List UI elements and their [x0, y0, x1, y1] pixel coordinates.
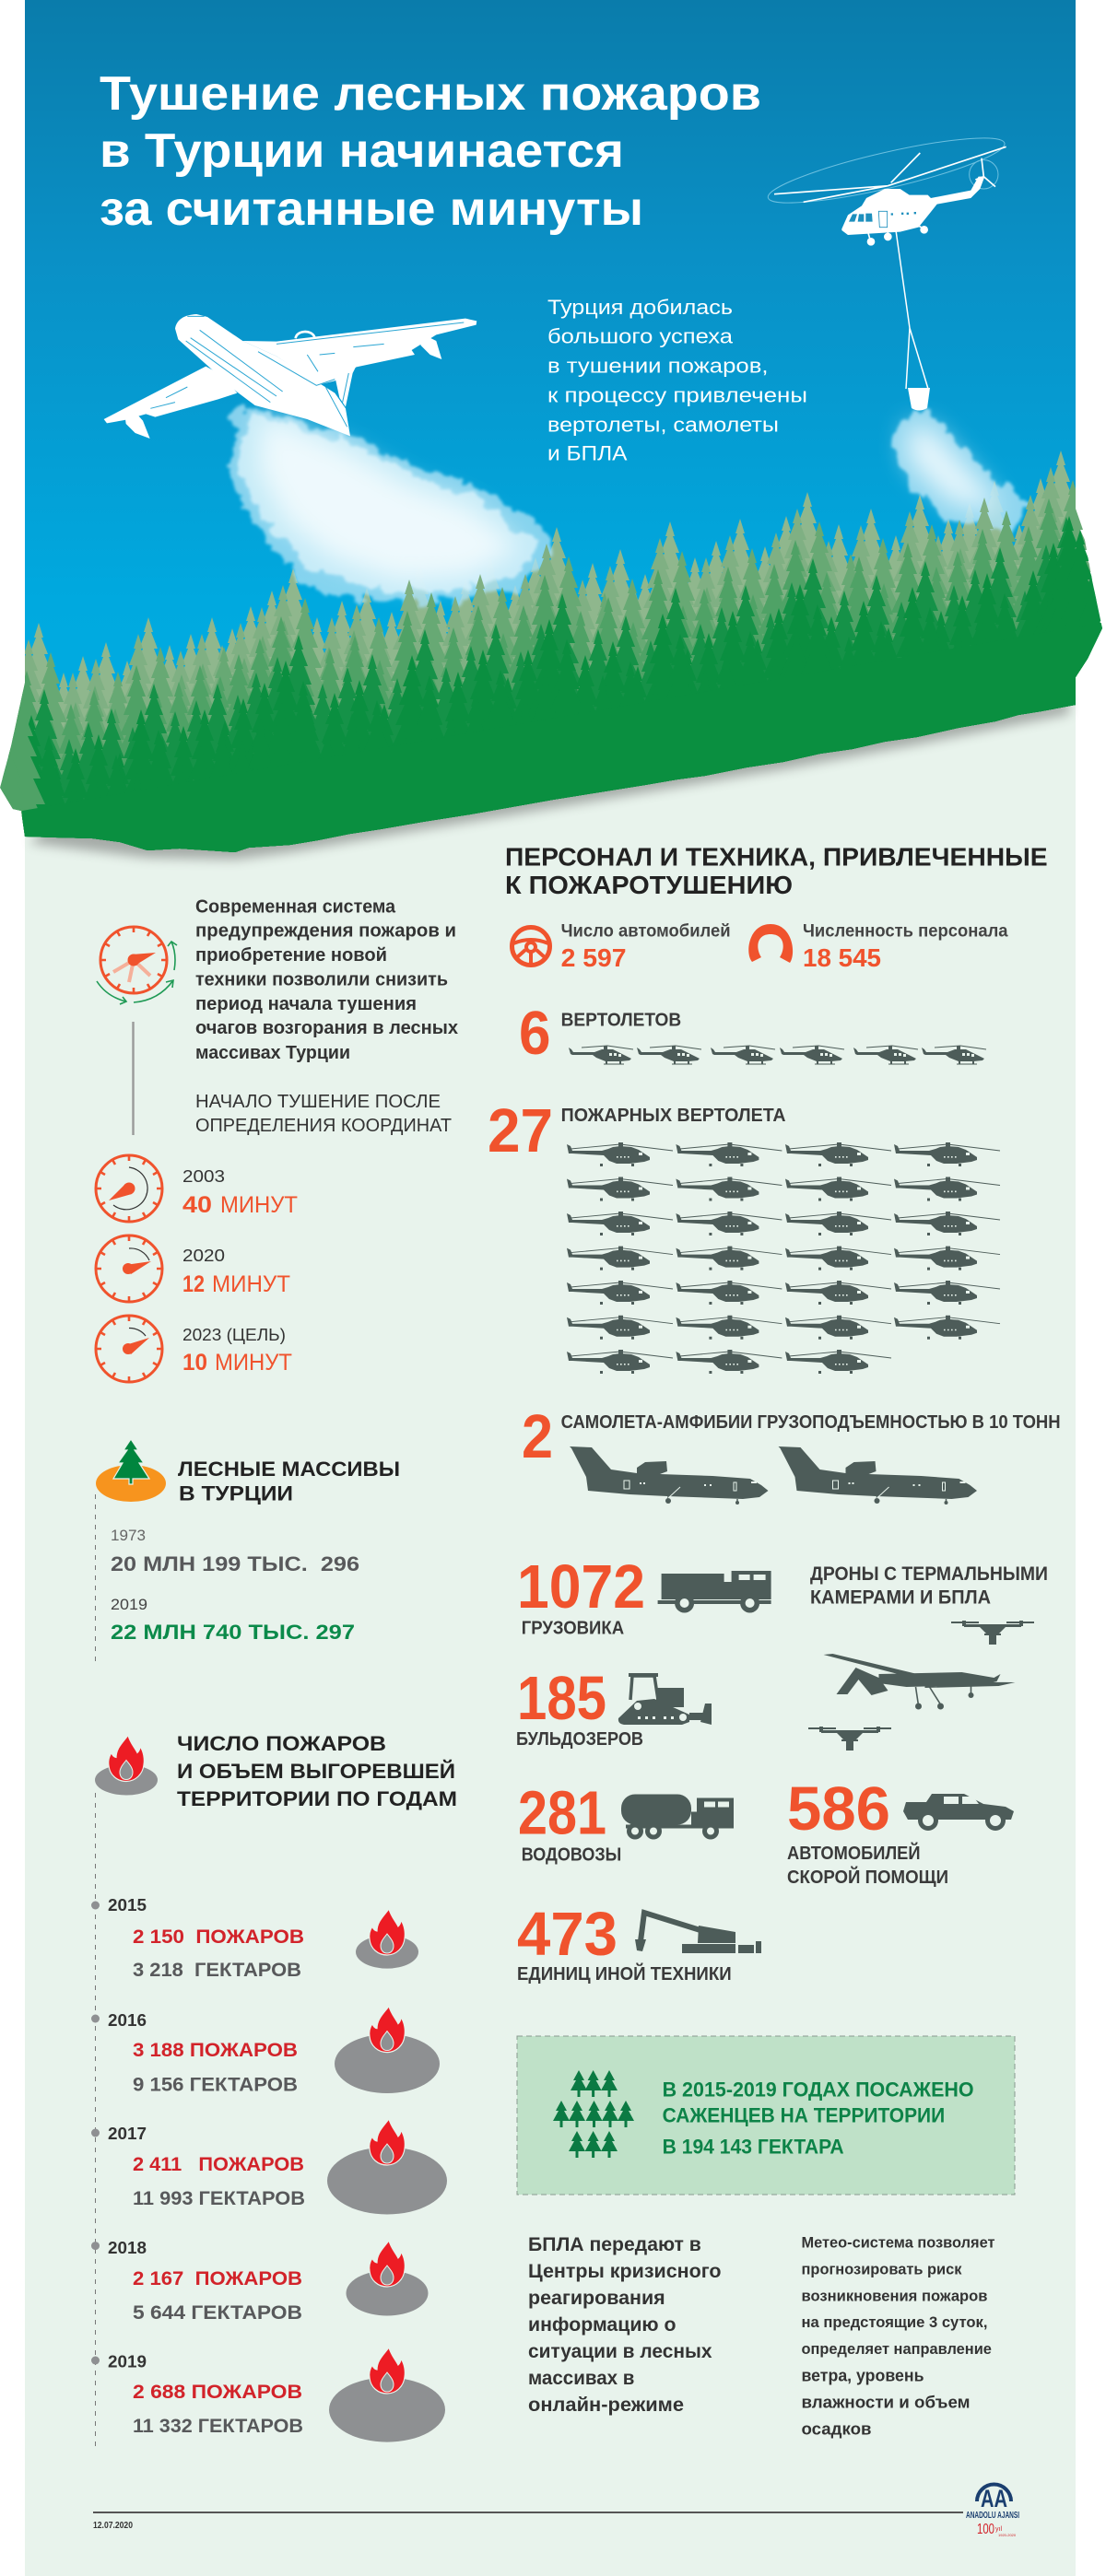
stat: 281 water trucks: 281: [518, 1778, 606, 1848]
stat: personnel: [803, 922, 1008, 972]
year 2017: 2017: [108, 2125, 147, 2143]
stat: 586 ambulances: 586: [787, 1774, 890, 1844]
year 2015: 2015: [108, 1896, 147, 1914]
decorative connector: [132, 1022, 135, 1135]
stat: 2 amphibious planes: САМОЛЕТА-АМФИБИИ ГРУЗОПОДЪЕМНОСТЬЮ В 10 ТОНН: [561, 1412, 1061, 1433]
time 2023: 2023 (ЦЕЛЬ): [182, 1326, 286, 1344]
stat: 473 other equipment: 473: [517, 1900, 618, 1969]
helicopter grid: [567, 1142, 1000, 1374]
intro text: в тушении пожаров,: [547, 354, 769, 378]
stat: 281 water trucks: ВОДОВОЗЫ: [522, 1844, 621, 1865]
year 2016: 3 188 ПОЖАРОВ: [133, 2040, 298, 2061]
stat: 1072 trucks: ГРУЗОВИКА: [522, 1619, 624, 1639]
intro text: Турция добилась: [547, 296, 733, 319]
decorative timeline: [94, 1494, 96, 1665]
year 2019: [91, 2348, 445, 2442]
stat: 586 ambulances: АВТОМОБИЛЕЙ: [787, 1842, 920, 1864]
clock 2003: [96, 1155, 162, 1222]
text block: warning system: период начала тушения: [195, 994, 417, 1014]
stat: vehicles: [561, 922, 731, 972]
forest heading text: В ТУРЦИИ: [179, 1481, 293, 1505]
stat: personnel: 18 545: [803, 943, 881, 972]
callout text: [663, 2078, 974, 2158]
icon: quadcopter bottom: [808, 1727, 891, 1751]
subheading: start of extinguishing: НАЧАЛО ТУШЕНИЕ ПОСЛЕ: [195, 1092, 441, 1112]
text block: weather system: определяет направление: [802, 2340, 992, 2358]
fires heading icon: [95, 1736, 158, 1795]
year 2017: [91, 2119, 447, 2215]
year 2017: 2 411 ПОЖАРОВ: [133, 2154, 304, 2175]
year 2015: [91, 1896, 418, 1981]
intro text: к процессу привлечены: [547, 383, 807, 407]
logo: Anadolu Ajansi: AA: [981, 2485, 1007, 2512]
fires heading text: ЧИСЛО ПОЖАРОВ: [177, 1732, 386, 1755]
forest stats: 1973: [111, 1527, 146, 1544]
intro text: большого успеха: [547, 324, 734, 348]
logo: Anadolu Ajansi: 1920-2020: [998, 2533, 1017, 2537]
forest stats: 2019: [111, 1596, 147, 1613]
text block: UAV: БПЛА передают в: [528, 2234, 701, 2255]
text block: UAV: реагирования: [528, 2288, 665, 2309]
text block: weather system: прогнозировать риск: [802, 2261, 962, 2277]
time 2003: 2003: [182, 1167, 225, 1186]
text block: warning system: приобретение новой: [195, 945, 387, 966]
year 2019: 11 332 ГЕКТАРОВ: [133, 2416, 303, 2437]
text block: weather system: [802, 2234, 995, 2438]
forest stats: 20 МЛН 199 ТЫС. 296: [111, 1552, 359, 1575]
year 2017: 11 993 ГЕКТАРОВ: [133, 2188, 305, 2209]
text block: warning system: предупреждения пожаров и: [195, 921, 456, 942]
forest heading text: [178, 1458, 400, 1505]
logo: Anadolu Ajansi: 100: [977, 2522, 994, 2537]
logo: Anadolu Ajansi: [966, 2484, 1019, 2537]
time 2023: [182, 1326, 292, 1376]
hero: sky and forest: [0, 0, 1102, 852]
title: за считанные минуты: [100, 182, 643, 236]
text block: weather system: влажности и объем: [802, 2394, 970, 2412]
forest stats: [111, 1527, 359, 1644]
drones heading: [810, 1563, 1048, 1609]
planting callout: [517, 2036, 1015, 2195]
icon: tanker: [621, 1795, 734, 1839]
stat: 473 other equipment: ЕДИНИЦ ИНОЙ ТЕХНИКИ: [517, 1962, 732, 1985]
clock 2020: [96, 1235, 162, 1302]
stat: 185 bulldozers: БУЛЬДОЗЕРОВ: [516, 1729, 643, 1750]
title: Тушение лесных пожаров: [100, 67, 761, 121]
year 2018: 2018: [108, 2239, 147, 2257]
logo: Anadolu Ajansi: yıl: [995, 2526, 1002, 2533]
stat: 586 ambulances: СКОРОЙ ПОМОЩИ: [787, 1866, 948, 1888]
stat: 185 bulldozers: 185: [517, 1664, 606, 1733]
subheading: start of extinguishing: ОПРЕДЕЛЕНИЯ КООРДИНАТ: [195, 1116, 452, 1136]
year 2016: 2016: [108, 2011, 147, 2030]
text block: UAV: массивах в: [528, 2368, 634, 2389]
forest heading with icon: [96, 1439, 166, 1502]
title: [100, 67, 761, 236]
stat: 6 helicopters: [519, 999, 681, 1068]
intro text: и БПЛА: [547, 442, 628, 464]
stat: 27 fire helicopters: ПОЖАРНЫХ ВЕРТОЛЕТА: [561, 1106, 786, 1126]
year 2018: 5 644 ГЕКТАРОВ: [133, 2302, 302, 2324]
icon: main clock: [97, 927, 177, 1004]
stat: 2 amphibious planes: [522, 1402, 1061, 1471]
intro text: вертолеты, самолеты: [547, 413, 779, 437]
far tree row: [7, 451, 1070, 810]
fires heading text: [177, 1732, 457, 1810]
text block: weather system: ветра, уровень: [802, 2367, 924, 2385]
text block: weather system: возникновения пожаров: [802, 2287, 988, 2304]
stat: 185 bulldozers: [516, 1664, 643, 1750]
water spray from helicopter: [896, 410, 1030, 535]
text block: UAV: информацию о: [528, 2314, 677, 2336]
stat: 1072 trucks: 1072: [517, 1552, 645, 1622]
fires heading text: ТЕРРИТОРИИ ПО ГОДАМ: [177, 1787, 457, 1810]
year 2019: 2019: [108, 2353, 147, 2371]
fires heading text: И ОБЪЕМ ВЫГОРЕВШЕЙ: [177, 1760, 455, 1783]
text block: UAV: Центры кризисного: [528, 2261, 721, 2282]
date: 12.07.2020: [93, 2521, 133, 2531]
text block: warning system: очагов возгорания в лесных: [195, 1018, 458, 1038]
forest layers: [0, 467, 1102, 852]
icon: truck: [658, 1571, 771, 1612]
decorative footer rule: [93, 2512, 963, 2513]
year 2015: 3 218 ГЕКТАРОВ: [133, 1960, 301, 1981]
drones heading: КАМЕРАМИ И БПЛА: [810, 1587, 991, 1609]
icon: helicopter with bucket: [764, 126, 1008, 410]
stat: 6 helicopters: 6: [519, 999, 551, 1068]
text block: weather system: Метео-система позволяет: [802, 2234, 995, 2252]
small helicopters row: [569, 1046, 986, 1064]
drones heading: ДРОНЫ С ТЕРМАЛЬНЫМИ: [810, 1563, 1048, 1585]
time 2003: 40: [182, 1192, 212, 1218]
forest shadow: [29, 700, 1069, 860]
stat: 6 helicopters: ВЕРТОЛЕТОВ: [561, 1010, 681, 1030]
forest heading text: ЛЕСНЫЕ МАССИВЫ: [178, 1458, 400, 1481]
text block: warning system: Современная система: [195, 896, 396, 917]
callout text: В 2015-2019 ГОДАХ ПОСАЖЕНО: [663, 2078, 974, 2102]
icon: trees: [553, 2070, 634, 2158]
text block: warning system: массивах Турции: [195, 1043, 350, 1063]
icon: bulldozer: [618, 1673, 712, 1725]
year 2018: [91, 2239, 428, 2324]
water spray from plane: [229, 405, 553, 603]
forest stats: 22 МЛН 740 ТЫС. 297: [111, 1621, 355, 1644]
time 2020: 2020: [182, 1247, 225, 1265]
stat: personnel: Численность персонала: [803, 922, 1008, 942]
amphibious plane icons: [570, 1446, 977, 1505]
text block: warning system: техники позволили снизить: [195, 969, 448, 989]
time 2003: [182, 1167, 298, 1218]
time 2023: МИНУТ: [215, 1350, 292, 1376]
text block: UAV: [528, 2234, 721, 2416]
time 2003: МИНУТ: [220, 1192, 298, 1218]
section heading: personnel and equipment: [505, 842, 1048, 899]
year 2015: 2 150 ПОЖАРОВ: [133, 1926, 304, 1948]
subheading: start of extinguishing: [195, 1092, 452, 1136]
icon: steering wheel: [512, 927, 549, 966]
intro text: [547, 296, 807, 464]
year 2016: [91, 2007, 440, 2095]
stat: vehicles: Число автомобилей: [561, 922, 731, 942]
stat: 27 fire helicopters: [488, 1096, 786, 1165]
icon: excavator: [635, 1913, 761, 1953]
text block: weather system: осадков: [802, 2419, 872, 2438]
text block: weather system: на предстоящие 3 суток,: [802, 2313, 988, 2331]
stat: 27 fire helicopters: 27: [488, 1096, 553, 1165]
time 2020: 12: [182, 1271, 205, 1297]
text block: UAV: ситуации в лесных: [528, 2341, 712, 2362]
year 2019: 2 688 ПОЖАРОВ: [133, 2382, 302, 2403]
stat: vehicles: 2 597: [561, 943, 627, 972]
callout text: САЖЕНЦЕВ НА ТЕРРИТОРИИ: [663, 2104, 945, 2127]
icon: water bomber plane: [104, 314, 477, 439]
title: в Турции начинается: [100, 124, 624, 178]
text block: UAV: онлайн-режиме: [528, 2395, 684, 2416]
icon: quadcopter top: [951, 1621, 1034, 1645]
year 2018: 2 167 ПОЖАРОВ: [133, 2268, 302, 2289]
clock 2023: [96, 1316, 162, 1382]
icon: UAV: [824, 1654, 1016, 1710]
logo: Anadolu Ajansi: ANADOLU AJANSI: [966, 2511, 1019, 2521]
text block: warning system: [195, 896, 458, 1063]
time 2020: МИНУТ: [212, 1271, 290, 1297]
stat: 586 ambulances: [787, 1774, 948, 1888]
section heading: personnel and equipment: ПЕРСОНАЛ И ТЕХНИКА, ПРИВЛЕЧЕННЫЕ: [505, 842, 1048, 872]
icon: pickup: [903, 1794, 1014, 1831]
stat: 473 other equipment: [517, 1900, 732, 1985]
decorative timeline: [94, 1793, 96, 2450]
callout text: В 194 143 ГЕКТАРА: [663, 2136, 844, 2158]
time 2023: 10: [182, 1350, 207, 1376]
icon: person: [748, 924, 793, 963]
year 2016: 9 156 ГЕКТАРОВ: [133, 2075, 298, 2095]
time 2020: [182, 1247, 290, 1297]
section heading: personnel and equipment: К ПОЖАРОТУШЕНИЮ: [505, 871, 793, 899]
stat: 2 amphibious planes: 2: [522, 1402, 553, 1471]
